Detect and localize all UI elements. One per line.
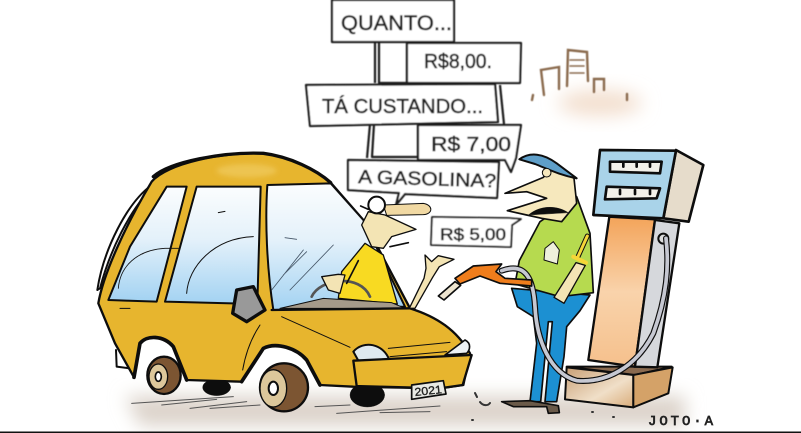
- rear side window: [108, 187, 187, 302]
- gas pump: [565, 150, 703, 407]
- mirror: [233, 287, 265, 322]
- windshield: [266, 183, 405, 310]
- bubble: R$ 7,00: R$ 7,00: [431, 134, 511, 156]
- arm: [554, 263, 585, 303]
- bubble: R$ 7,00: [418, 125, 521, 172]
- front wheel: [260, 363, 308, 411]
- car body: [98, 153, 470, 388]
- gas station attendant: [502, 155, 593, 413]
- driver shirt: [338, 243, 397, 304]
- smog haze: [558, 90, 642, 116]
- roof outline: [153, 153, 331, 183]
- bubble: R$ 5,00: [431, 217, 521, 247]
- driver head: [361, 197, 431, 248]
- windshield streaks: [272, 238, 333, 290]
- rear wheel: [147, 357, 181, 394]
- pump head front: [593, 150, 676, 218]
- bubble: R$ 8,00: R$8,00.: [424, 51, 492, 73]
- door window: [165, 187, 261, 304]
- ground specks: [472, 393, 614, 420]
- trousers: [512, 288, 590, 402]
- pump head side: [663, 150, 703, 222]
- bubble: A gasolina: [348, 160, 499, 205]
- head: [505, 167, 577, 222]
- front bumper: [353, 355, 472, 388]
- bubble connector: Quanto to R$ 8,00: [375, 42, 407, 83]
- ground shadow: [125, 396, 685, 426]
- roof highlight: [217, 164, 277, 177]
- cap: [519, 155, 577, 178]
- car with driver: [97, 153, 472, 413]
- shoes: [502, 401, 559, 413]
- driver arm: [409, 255, 454, 308]
- speech bubbles: [306, 0, 521, 247]
- bubble connector: Tá custando to R$ 7,00: [367, 85, 504, 158]
- license plate: 2021: [414, 384, 442, 399]
- shirt: [515, 197, 593, 297]
- bubble: Quanto: QUANTO...: [341, 12, 452, 35]
- bubble: R$ 5,00: R$ 5,00: [440, 226, 506, 244]
- license plate: [412, 381, 446, 399]
- bubble: Quanto: [332, 0, 454, 42]
- fuel hose and nozzle: [438, 238, 667, 381]
- bubble: R$ 8,00: [407, 43, 521, 83]
- far wheels: [203, 379, 231, 396]
- bubble: Tá custando: TÁ CUSTANDO...: [322, 95, 483, 118]
- steering wheel and hand: [312, 281, 370, 297]
- price displays: [610, 162, 662, 173]
- pump column: [588, 217, 655, 367]
- pump base: [567, 367, 672, 375]
- artist signature: JOTO·A: [648, 414, 714, 430]
- bottom border line: [0, 432, 801, 433]
- shirt pocket: [544, 242, 559, 264]
- nozzle handle: [455, 264, 532, 286]
- nozzle spout: [438, 282, 461, 300]
- wheel arches: [134, 337, 320, 385]
- bubble: A gasolina: A GASOLINA?: [358, 167, 496, 192]
- body lines: [120, 308, 350, 370]
- dashboard: [280, 298, 405, 308]
- icon: distant city skyline: [532, 50, 627, 100]
- headlights: [353, 345, 389, 361]
- bubble: Tá custando: [306, 84, 498, 126]
- rear bumper arc: [97, 185, 152, 290]
- road marks: [132, 397, 440, 413]
